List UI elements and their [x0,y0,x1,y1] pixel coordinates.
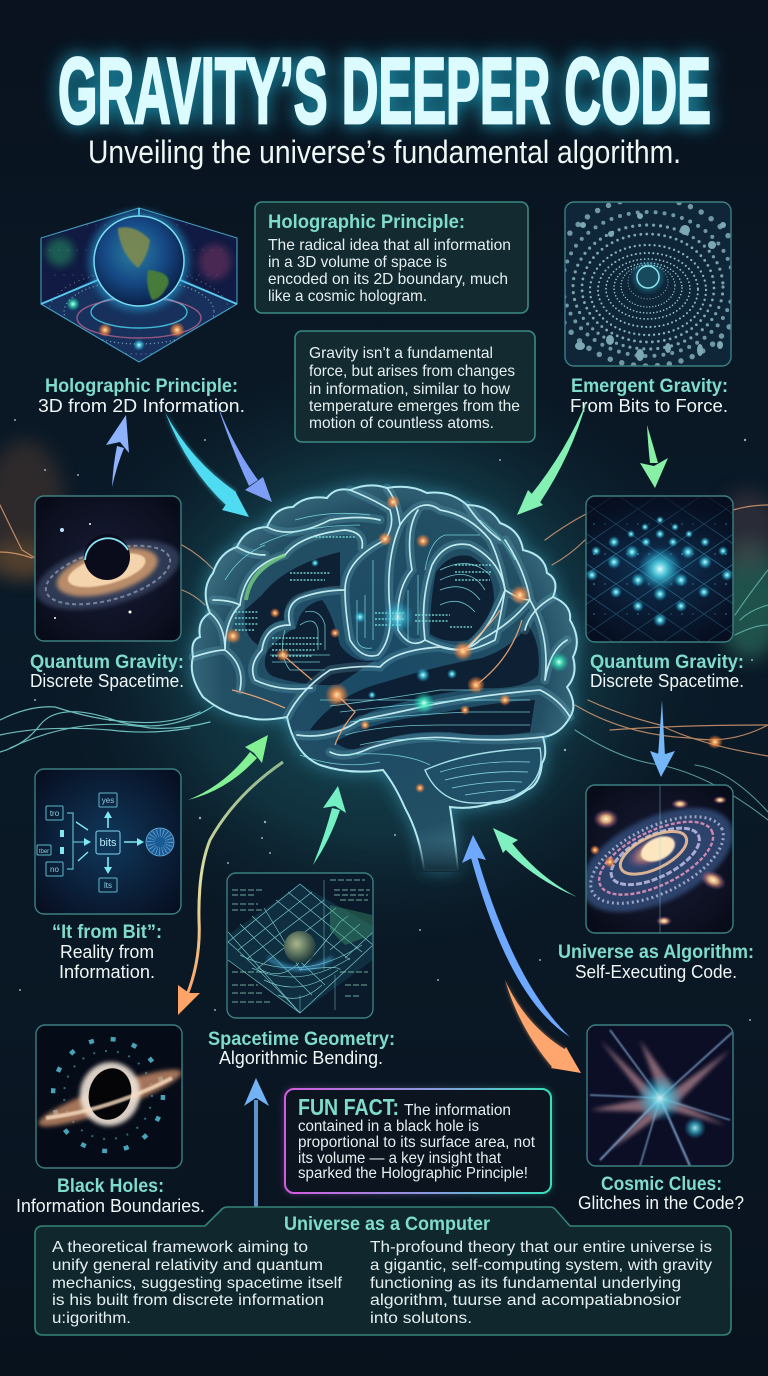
panel: universe as a computer: Universe as a Computer [284,1214,491,1235]
panel: it from bit diagram: yes [102,796,114,805]
arrow: blue up to spacetime geometry [244,1078,269,1207]
label: quantum gravity right: Quantum Gravity: [590,652,744,673]
label: it from bit: Information. [59,962,155,982]
label: universe as algorithm: Self-Executing Code. [575,962,737,982]
card: emergent gravity explanation: force, but arises from changes [309,363,515,380]
callout: fun fact: The information [404,1102,511,1119]
brain gyri folds [193,488,570,755]
panel: it from bit diagram: bits [99,837,117,849]
label: spacetime geometry: Algorithmic Bending. [219,1048,383,1068]
brain illustration [192,485,577,872]
card: holographic principle: encoded on its 2D boundary, much [268,271,508,288]
brain circuit traces [225,513,530,765]
arrow: teal up to brain [313,786,346,865]
arrow: orange to cosmic clues [505,980,581,1073]
label: quantum gravity right [590,652,744,691]
label: spacetime geometry [208,1029,395,1068]
panel: universe as a computer: unify general relativity and quantum [52,1257,323,1274]
panel: quantum gravity black hole galaxy image [29,496,187,641]
card: holographic principle: in a 3D volume of space is [268,254,447,271]
card: emergent gravity explanation [295,331,535,442]
green fold highlight [246,555,285,600]
arrow: blue down to galaxy [650,700,675,777]
panel: universe as a computer: is his built from discrete information [52,1292,324,1309]
callout: fun fact: contained in a black hole is [298,1118,479,1135]
arrow: cyan to brain [165,412,249,517]
panel: universe as algorithm galaxy image [585,784,734,934]
label: emergent gravity [570,376,728,416]
label: black holes [16,1176,205,1216]
panel: it from bit diagram: tber [39,849,49,855]
arrow: green from it-from-bit to brain [188,735,268,800]
panel: spacetime geometry image [227,873,373,1018]
card: emergent gravity explanation: Gravity isn't a fundamental [309,345,493,362]
stem fade [415,840,465,872]
label: holographic principle: 3D from 2D Information. [38,396,245,416]
panel: universe as a computer: Th-profound theory that our entire universe is [370,1239,712,1256]
panel: quantum gravity lattice image [586,496,733,642]
card: emergent gravity explanation: temperature emerges from the [309,398,520,415]
callout: fun fact: proportional to its surface area, not [298,1134,536,1151]
label: it from bit [52,922,162,982]
brain body [192,485,577,870]
panel: it from bit diagram [35,769,181,914]
label: cosmic clues [578,1174,744,1213]
arrow: green down to quantum lattice [640,425,668,488]
energy streams: left and right background lines [0,505,768,820]
brain code snippets [235,537,492,656]
panel: cosmic clues image [587,1025,735,1166]
label: quantum gravity left: Discrete Spacetime. [30,671,184,691]
label: black holes: Black Holes: [57,1176,164,1197]
arrow: to holographic label, blue up [106,415,129,487]
callout: fun fact: FUN FACT: [298,1094,399,1120]
panel: universe as a computer: A theoretical framework aiming to [52,1239,308,1256]
label: holographic principle [38,376,245,416]
label: universe as algorithm: Universe as Algorithm: [558,942,754,963]
label: quantum gravity right: Discrete Spacetime. [590,671,744,691]
brain glowing nodes [225,495,569,793]
label: cosmic clues: Glitches in the Code? [578,1193,744,1213]
panel: it from bit diagram: no [50,865,59,874]
panel: universe as a computer [35,1207,731,1335]
panel: it from bit diagram: tro [50,809,60,818]
arrow: violet-blue to brain [215,398,272,502]
panel: universe as a computer: functioning as its fundamental underlying [370,1275,681,1292]
callout: fun fact: its volume — a key insight that [298,1150,502,1167]
label: it from bit: “It from Bit”: [52,922,162,943]
brain fold tubes [193,488,570,755]
subtitle: Unveiling the universe’s fundamental algorithm. [88,134,681,170]
card: emergent gravity explanation: motion of countless atoms. [309,415,494,432]
label: universe as algorithm [558,942,754,982]
orange data traces [232,610,522,745]
panel: black holes image [34,1025,186,1168]
card: holographic principle: The radical idea that all information [268,237,511,254]
callout: fun fact [285,1089,551,1193]
label: black holes: Information Boundaries. [16,1196,205,1216]
arrow: long blue to brain [462,835,570,1037]
label: quantum gravity left [30,652,184,691]
card: holographic principle [255,202,528,313]
label: quantum gravity left: Quantum Gravity: [30,652,184,673]
panel: universe as a computer: into solutons. [370,1310,472,1327]
arrow: long green-orange to black holes [178,762,283,1015]
panel: universe as a computer: u:igorithm. [52,1310,131,1327]
label: spacetime geometry: Spacetime Geometry: [208,1029,395,1050]
brain dark inner regions [245,552,539,749]
label: cosmic clues: Cosmic Clues: [601,1174,722,1195]
panel: universe as a computer: a gigantic, self-computing system, with gravity [370,1257,712,1274]
label: it from bit: Reality from [60,942,154,962]
label: emergent gravity: Emergent Gravity: [571,376,728,397]
card: holographic principle: like a cosmic hologram. [268,288,427,305]
callout: fun fact: sparked the Holographic Principle! [298,1165,528,1182]
label: holographic principle: Holographic Principle: [45,376,238,397]
card: emergent gravity explanation: in information, similar to how [309,381,510,398]
arrow: green from emergent gravity to brain [517,400,587,515]
panel: holographic cube image [41,208,237,362]
arrow: green from galaxy to brain [493,828,577,897]
panel: emergent gravity image [564,201,732,367]
brain cerebellum [425,748,541,803]
card: holographic principle: Holographic Principle: [268,212,465,233]
panel: universe as a computer: mechanics, suggesting spacetime itself [52,1275,343,1292]
panel: universe as a computer: algorithm, tuurse and acompatiabnosior [370,1292,682,1309]
label: emergent gravity: From Bits to Force. [570,396,728,416]
panel: it from bit diagram: lts [104,881,112,890]
